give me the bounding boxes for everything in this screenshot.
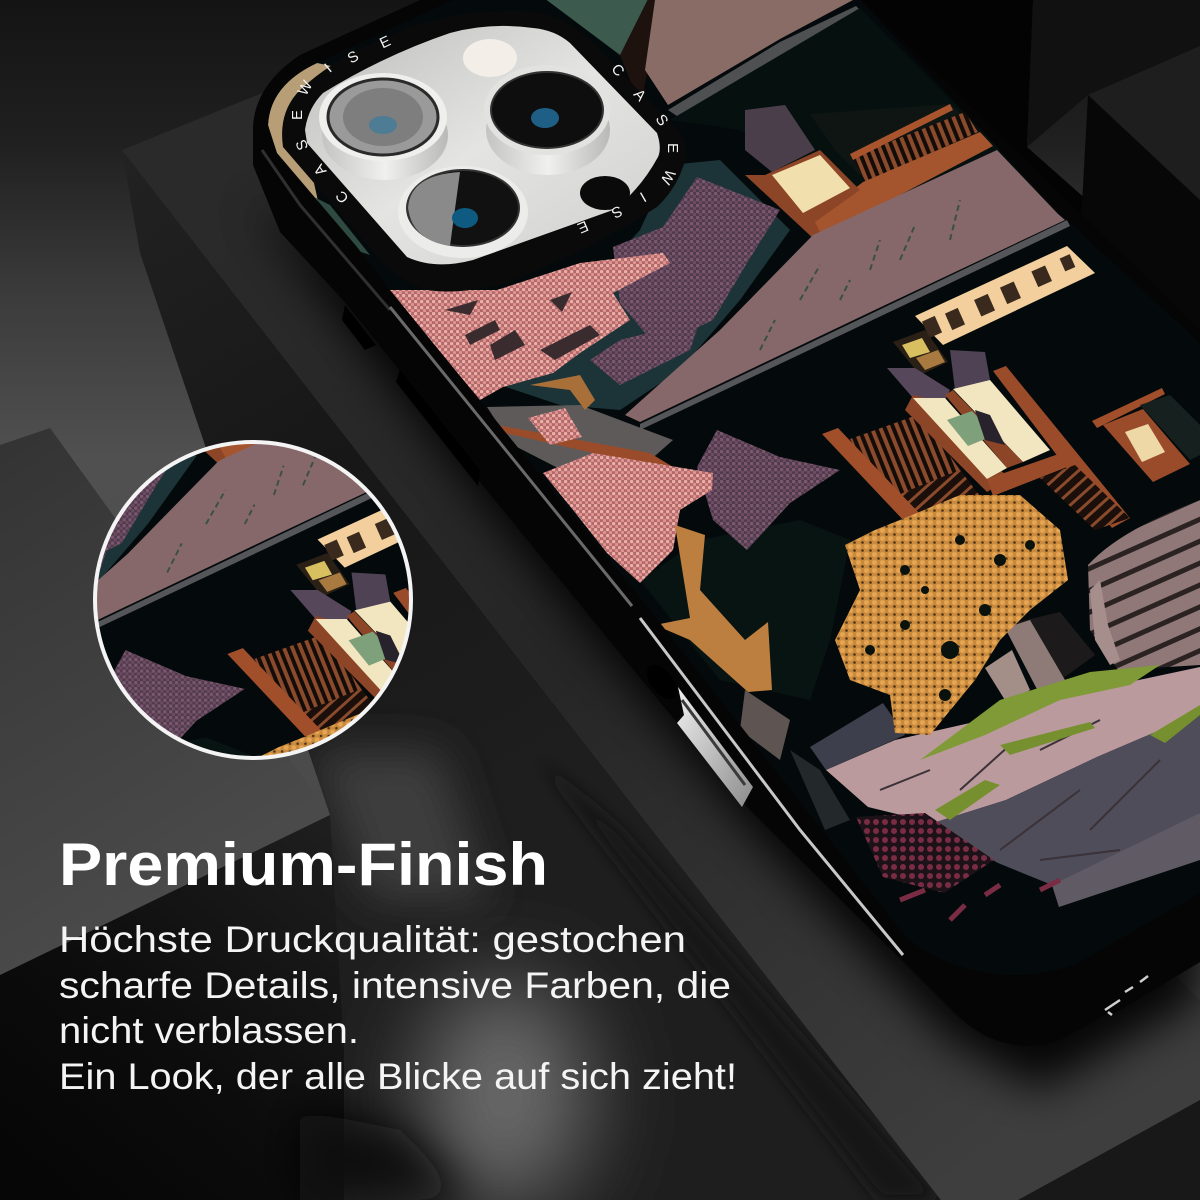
casewise ring text: S — [652, 111, 671, 129]
lens 1 — [319, 73, 448, 180]
title: Premium-Finish — [59, 831, 548, 898]
casewise ring text: W — [295, 77, 317, 99]
casewise ring text: I — [321, 61, 335, 76]
background: lower left block front — [0, 815, 344, 1200]
phone — [250, 0, 1200, 1046]
background: main block side face — [122, 150, 941, 1200]
phone screen artwork — [268, 0, 1200, 922]
body text — [59, 919, 737, 1097]
background: side face light — [310, 750, 941, 1200]
casewise ring text: C — [608, 61, 628, 80]
action button recess — [641, 659, 683, 705]
mute switch — [342, 305, 376, 350]
body text: Höchste Druckqualität: gestochen — [59, 919, 686, 960]
usb port — [1105, 947, 1200, 1015]
body text: scharfe Details, intensive Farben, die — [59, 965, 731, 1006]
background: rear dark corner — [850, 0, 1200, 400]
casewise ring text: W — [656, 166, 678, 188]
lens 3 — [398, 166, 528, 258]
lens 2 — [484, 65, 610, 175]
usb port highlight — [1105, 976, 1148, 1015]
casewise ring text — [289, 33, 681, 236]
background: lower left block top — [0, 428, 330, 975]
casewise ring text: S — [293, 137, 312, 152]
background: floor corner — [1018, 1100, 1200, 1200]
camera island — [282, 11, 686, 291]
casewise ring text: E — [289, 110, 306, 120]
body text: nicht verblassen. — [59, 1010, 359, 1051]
detail magnifier circle — [93, 440, 413, 760]
background: rear pedestal top — [1088, 46, 1200, 200]
volume button slot — [396, 370, 480, 486]
flash — [463, 39, 517, 77]
action button chrome — [677, 687, 753, 807]
casewise ring text: C — [332, 187, 352, 206]
background: rear pedestal face — [1080, 95, 1200, 360]
casewise ring text: A — [630, 86, 649, 105]
phone edge highlight upper — [390, 307, 632, 606]
phone edge highlight lower — [640, 618, 903, 955]
casewise ring text: E — [664, 143, 681, 153]
casewise ring text: E — [377, 33, 393, 52]
background: top right wall — [1027, 0, 1200, 147]
background: soft floor fade — [300, 1110, 470, 1200]
casewise ring text: A — [311, 161, 330, 179]
camera glass — [305, 26, 660, 264]
shadow of phone — [250, 200, 1200, 1090]
action button groove — [682, 700, 745, 785]
casewise ring text: E — [575, 217, 591, 236]
casewise ring text: S — [609, 202, 625, 221]
island ring — [282, 11, 686, 291]
mic hole — [580, 176, 630, 210]
casewise ring text: I — [637, 188, 649, 205]
casewise ring text: S — [345, 48, 362, 67]
body text: Ein Look, der alle Blicke auf sich zieht! — [59, 1056, 737, 1097]
phone frame gloss — [262, 150, 390, 310]
phone body — [253, 0, 1200, 1046]
